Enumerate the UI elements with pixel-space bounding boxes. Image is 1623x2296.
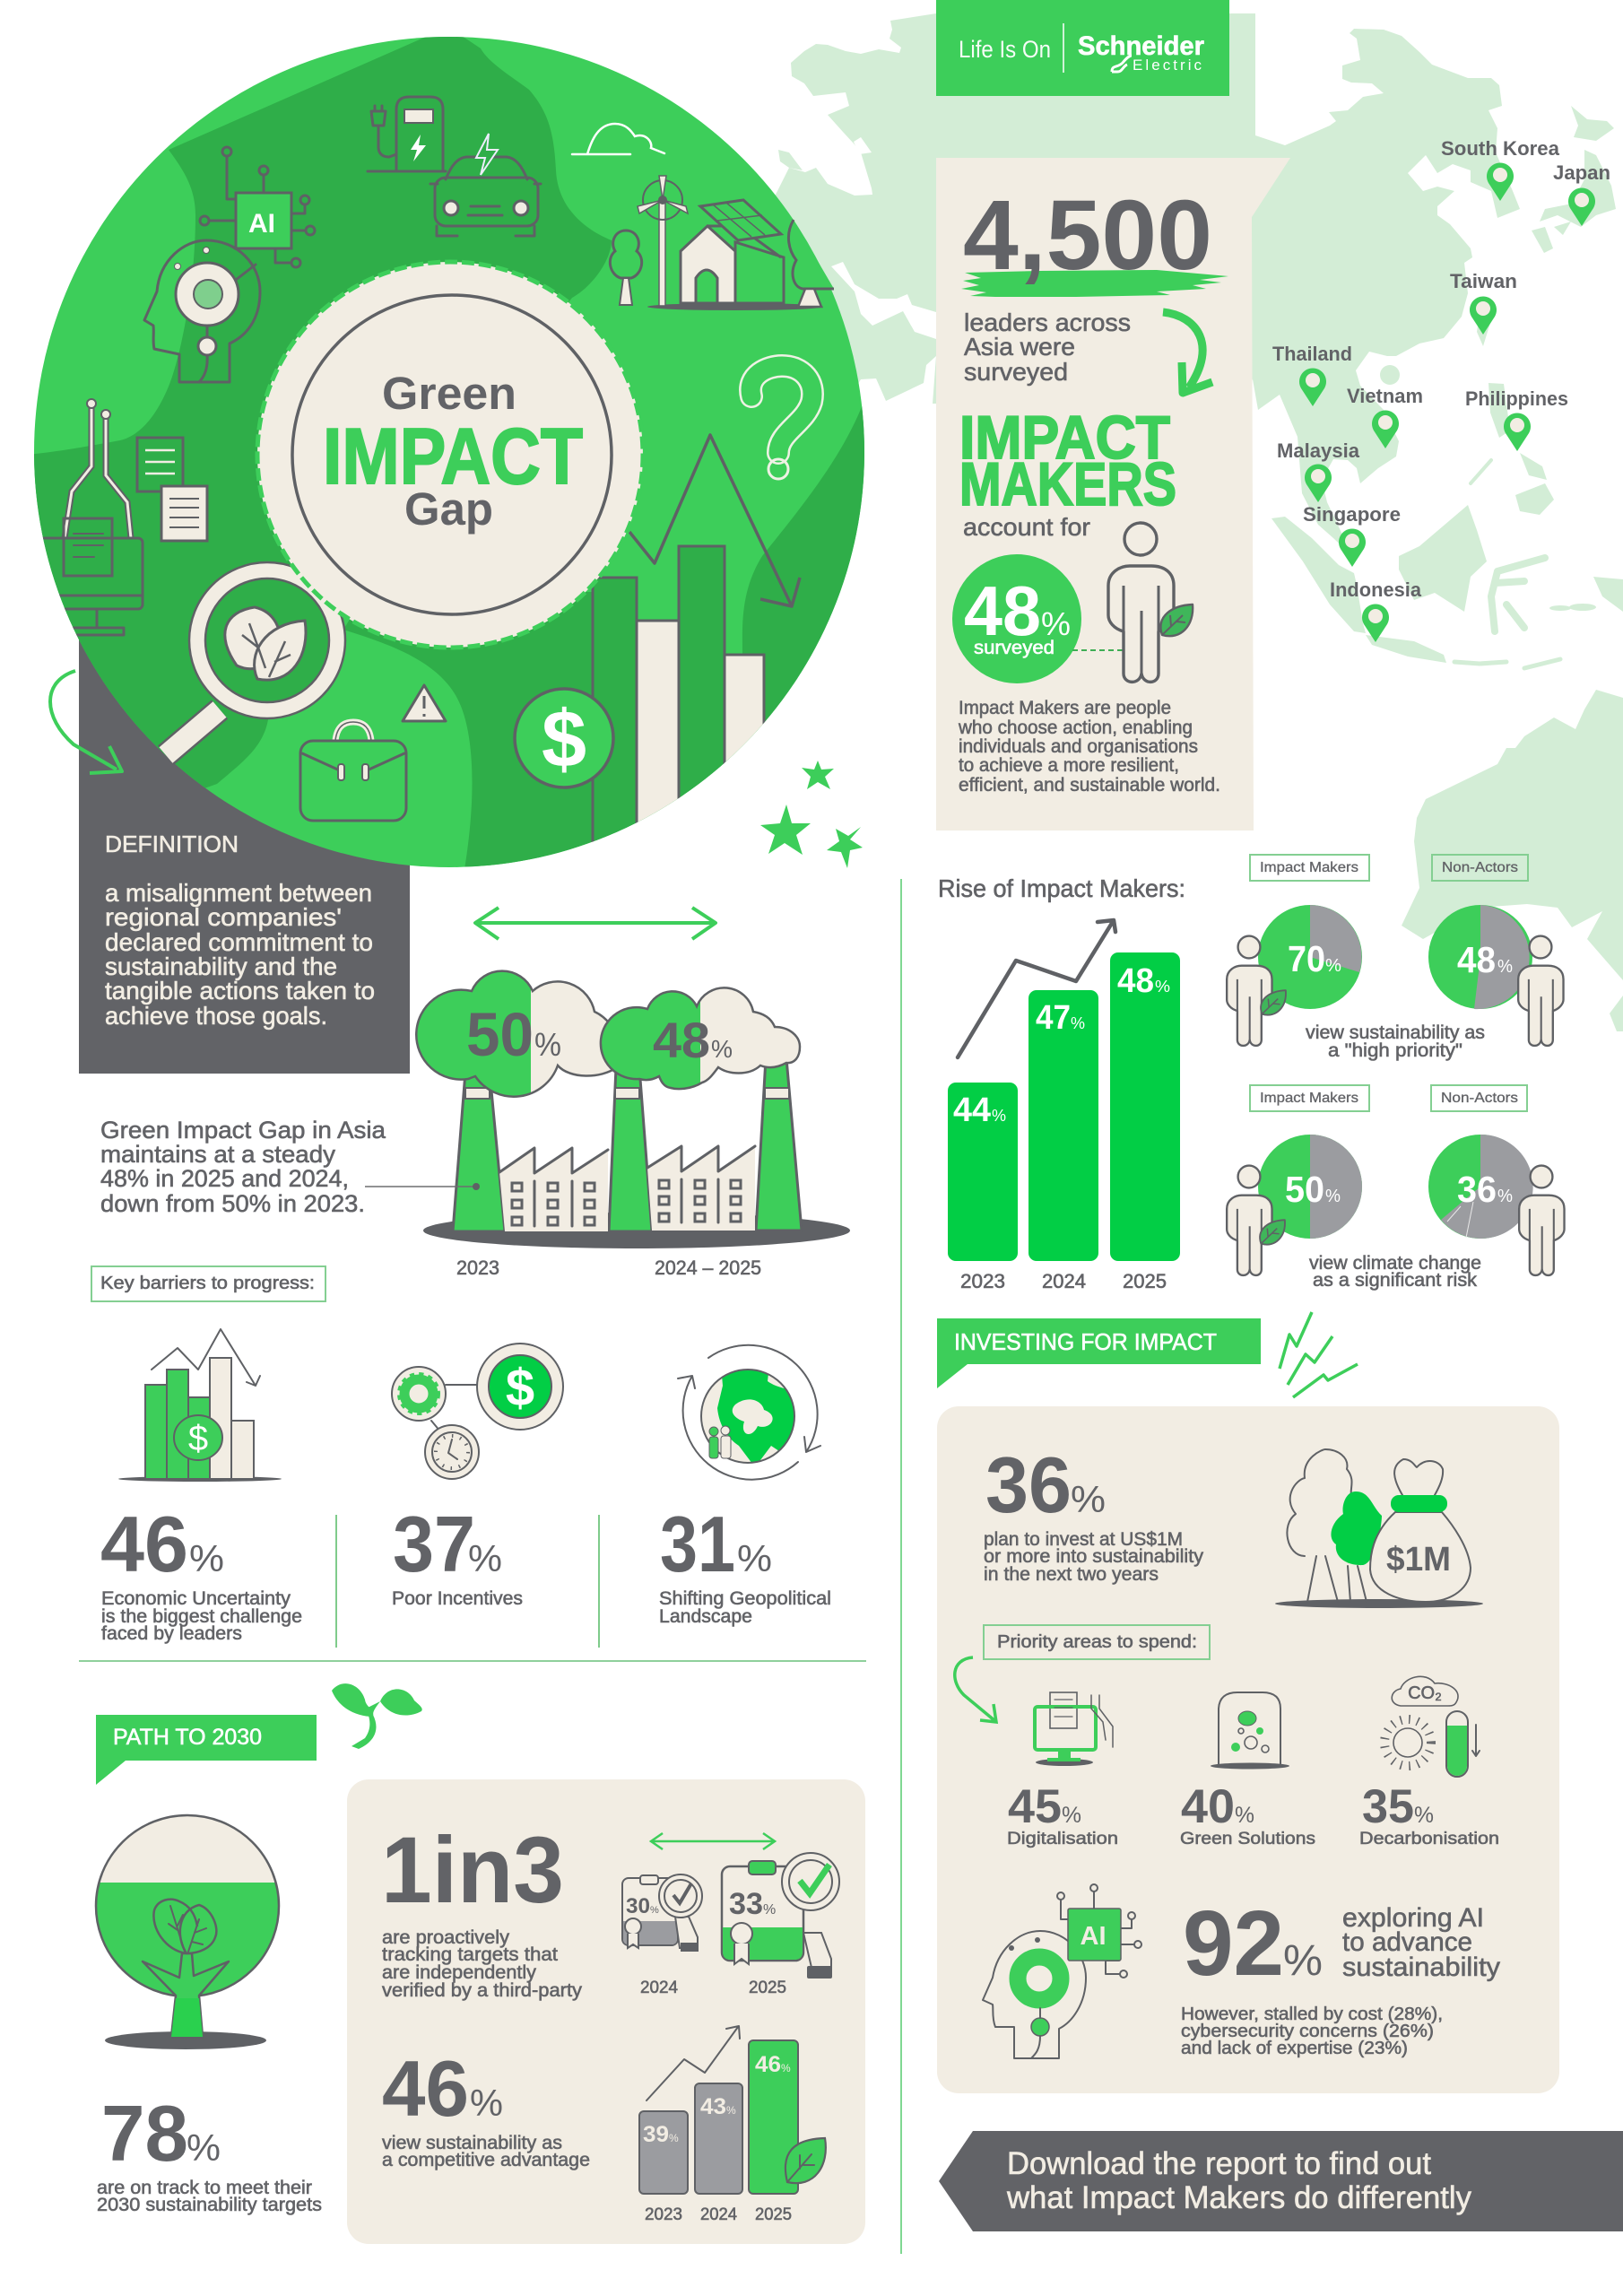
pie: impact makers 70%: 70	[1288, 938, 1325, 979]
pie row: high priority: Impact Makers	[1260, 860, 1358, 875]
48% surveyed badge	[952, 554, 1081, 683]
banner: path to 2030	[96, 1715, 317, 1785]
stat: 31% geopolitical: Shifting Geopolitical	[659, 1588, 831, 1609]
stat: 46% competitive advantage	[382, 2044, 590, 2170]
pie: non-actors 36%: %	[1497, 1187, 1513, 1206]
factory illustration with clouds: 2024 – 2025	[655, 1257, 761, 1279]
pie: non-actors 48%: %	[1497, 957, 1513, 977]
bar chart: rise of impact makers: 48	[1117, 962, 1154, 1000]
pie: impact makers 70%: %	[1325, 956, 1341, 976]
callout: gap in Asia: 48% in 2025 and 2024,	[100, 1165, 349, 1192]
panel: path statistics: 2025	[749, 1979, 786, 1997]
icon: magnifier with leaves	[166, 562, 345, 755]
stat: 45% digitalisation	[1007, 1780, 1118, 1848]
bar chart: competitive advantage: 2024	[700, 2205, 737, 2224]
icon: clipboard 33% 2025: 33	[729, 1887, 763, 1921]
panel: definition	[79, 619, 410, 1074]
pie row: climate change risk: as a significant risk	[1313, 1270, 1478, 1291]
callout: gap in Asia: Green Impact Gap in Asia	[100, 1117, 386, 1144]
centre badge: Green Impact Gap: IMPACT	[323, 412, 583, 500]
location pins and country labels	[1272, 137, 1610, 642]
stat: 40% green solutions: 40	[1181, 1780, 1235, 1833]
bar chart: rise of impact makers: 2025	[1123, 1270, 1167, 1292]
stat: 78% on track: 2030 sustainability targets	[97, 2195, 322, 2215]
pie: non-actors 36%	[1428, 1135, 1533, 1239]
icon: dollar coin: $	[542, 695, 586, 785]
bar chart: rise of impact makers	[948, 920, 1180, 1292]
factory 2023	[499, 1148, 608, 1231]
location pins and country labels: Thailand	[1272, 343, 1352, 365]
icon: digital monitor	[1035, 1692, 1113, 1766]
definition text: tangible actions taken to	[105, 977, 375, 1004]
stat: 46% economic uncertainty: faced by leaders	[101, 1623, 242, 1644]
icon: dollar coin	[515, 689, 613, 787]
stat: 31% geopolitical: Landscape	[659, 1606, 752, 1627]
bar chart: competitive advantage: %	[669, 2132, 679, 2144]
cloud 50%: %	[534, 1026, 561, 1063]
icon: globe with arrows	[678, 1345, 820, 1480]
stat: 36% plan to invest: plan to invest at US$1M	[984, 1529, 1183, 1550]
panel: path statistics: 2024	[640, 1979, 678, 1997]
arrow: rising trend	[958, 920, 1115, 1057]
tag: priority areas	[984, 1625, 1210, 1659]
stat: 37% poor incentives: %	[468, 1537, 502, 1579]
stat: 37% poor incentives: 37	[393, 1500, 475, 1588]
call to action banner: what Impact Makers do differently	[1006, 2180, 1471, 2215]
bar chart: rise of impact makers: %	[1155, 978, 1170, 996]
pie: non-actors 48%	[1428, 905, 1532, 1009]
vertical column divider	[900, 879, 902, 2254]
banner: investing for impact	[937, 1318, 1261, 1388]
definition text	[105, 831, 375, 1030]
icon: AI head lower	[983, 1884, 1141, 2058]
icon: AI head	[144, 147, 315, 382]
definition text: declared commitment to	[105, 928, 373, 956]
stat: 40% green solutions: Green Solutions	[1180, 1829, 1315, 1848]
arrow: hand-drawn curved green	[1163, 312, 1212, 393]
icon: EV charger and car	[368, 97, 541, 236]
stat: 92% exploring AI: to advance	[1342, 1927, 1472, 1957]
description: to achieve a more resilient,	[959, 755, 1179, 776]
Schneider Electric wordmark: Schneider	[1078, 31, 1204, 61]
panel: investing for impact	[937, 1406, 1559, 2093]
cloud 48%	[601, 987, 800, 1089]
stat: 31% geopolitical	[659, 1500, 831, 1627]
stat: 92% exploring AI: exploring AI	[1342, 1903, 1484, 1933]
stat: 45% digitalisation: 45	[1008, 1780, 1062, 1833]
cloud 50%	[416, 971, 617, 1097]
icon: CO2, sun, thermometer: CO₂	[1408, 1683, 1442, 1703]
tagline: Life Is On: Life Is On	[959, 36, 1051, 63]
stat: 92% exploring AI: However, stalled by cost (28%),	[1181, 2005, 1443, 2024]
panel: 4,500 leaders surveyed	[936, 158, 1290, 831]
icon: trees and money bag	[1275, 1449, 1483, 1608]
stat: 92% exploring AI: sustainability	[1342, 1952, 1500, 1982]
stat: 46% economic uncertainty: is the biggest challenge	[101, 1606, 302, 1627]
big number 4,500: 4,500	[963, 180, 1212, 291]
stat: 46% economic uncertainty: 46	[100, 1500, 188, 1588]
icon: house with solar panels, turbine, trees	[610, 176, 834, 310]
green brush underline	[961, 270, 1228, 297]
description: efficient, and sustainable world.	[959, 775, 1220, 796]
arrow: two-way green	[475, 908, 716, 939]
pie row: climate change risk	[1227, 1085, 1565, 1291]
stat: 40% green solutions: %	[1235, 1803, 1254, 1828]
stat: 78% on track	[97, 2089, 322, 2215]
world map background	[628, 13, 1623, 1031]
48% surveyed badge: 48	[964, 571, 1041, 650]
cloud 50%: 50	[466, 1000, 534, 1069]
stat: 46% competitive advantage: view sustainability as	[382, 2133, 562, 2153]
48% surveyed badge: surveyed	[974, 638, 1055, 658]
stat: 45% digitalisation: %	[1062, 1803, 1081, 1828]
centre badge: Green Impact Gap	[257, 262, 643, 648]
location pins and country labels: Malaysia	[1277, 439, 1360, 462]
pie: non-actors 36%: 36	[1457, 1169, 1497, 1210]
logo banner: Electric	[1133, 57, 1202, 74]
icon: question mark	[751, 366, 812, 479]
pie: impact makers 70%	[1258, 905, 1362, 1009]
stat: 45% digitalisation: Digitalisation	[1007, 1829, 1118, 1848]
factory illustration with clouds	[416, 971, 850, 1279]
location pins and country labels: Indonesia	[1330, 578, 1422, 601]
stat: 37% poor incentives: Poor Incentives	[392, 1588, 523, 1609]
stat: 78% on track: 78	[101, 2089, 188, 2178]
stat: 46% competitive advantage: 46	[382, 2044, 469, 2133]
pie: impact makers 50%: 50	[1285, 1169, 1324, 1210]
bar chart: rise of impact makers: %	[1071, 1014, 1085, 1032]
bar chart: competitive advantage	[639, 2026, 826, 2224]
panel: path statistics: tracking targets that	[382, 1944, 558, 1965]
bar chart: competitive advantage: 43	[700, 2094, 726, 2119]
description: who choose action, enabling	[958, 718, 1193, 738]
chimneys	[453, 1058, 802, 1231]
location pins and country labels: Taiwan	[1450, 270, 1517, 292]
pie row: climate change risk: view climate change	[1309, 1253, 1481, 1274]
panel: 4,500 leaders surveyed: surveyed	[964, 358, 1068, 386]
panel: 4,500 leaders surveyed: account for	[963, 513, 1090, 541]
panel: path statistics: verified by a third-party	[382, 1980, 583, 2001]
icon: bell jar with molecules	[1211, 1692, 1289, 1769]
description: Impact Makers are people	[959, 698, 1171, 718]
icon: trees and money bag: $1M	[1386, 1541, 1451, 1578]
call to action banner	[939, 2131, 1623, 2231]
callout: gap in Asia: maintains at a steady	[100, 1141, 335, 1168]
location pins and country labels: Japan	[1553, 161, 1610, 184]
stat: 92% exploring AI: 92	[1183, 1892, 1284, 1995]
pie row: climate change risk: Non-Actors	[1441, 1091, 1518, 1106]
pie row: high priority: Non-Actors	[1442, 860, 1518, 875]
stat: 36% plan to invest	[984, 1440, 1204, 1585]
stat: 1 in 3: 1in3	[381, 1818, 564, 1923]
stat: 46% economic uncertainty	[100, 1500, 302, 1644]
location pins and country labels: South Korea	[1441, 137, 1560, 160]
stat: 92% exploring AI: and lack of expertise (23%)	[1181, 2039, 1408, 2058]
stat: 78% on track: %	[187, 2126, 221, 2169]
bar chart: rise of impact makers: 44	[953, 1091, 991, 1129]
stat: 78% on track: are on track to meet their	[97, 2178, 312, 2198]
bar chart: competitive advantage: %	[726, 2104, 736, 2117]
stat: 36% plan to invest: in the next two years	[984, 1564, 1159, 1585]
stat: 36% plan to invest: %	[1071, 1478, 1106, 1520]
panel: path statistics	[347, 1779, 865, 2244]
stat: 46% competitive advantage: %	[470, 2082, 503, 2124]
logo banner	[936, 0, 1229, 96]
centre badge: Green Impact Gap: Green	[382, 368, 516, 419]
icon: incentives coin, gear, clock	[392, 1344, 563, 1479]
callout: gap in Asia	[100, 1117, 480, 1217]
panel: path statistics: are proactively	[382, 1927, 510, 1948]
arrow: two-way small	[651, 1833, 775, 1849]
tag: key barriers: Key barriers to progress:	[100, 1274, 315, 1293]
stat: 92% exploring AI	[1181, 1892, 1500, 2058]
48% surveyed badge: %	[1041, 605, 1071, 642]
icon: person with leaf	[1108, 523, 1193, 682]
centre badge: Green Impact Gap: Gap	[404, 483, 493, 535]
icon: AI head lower: AI	[1080, 1922, 1107, 1951]
stat: 40% green solutions	[1180, 1780, 1315, 1848]
stat: 35% decarbonisation: %	[1414, 1803, 1434, 1828]
stat: 35% decarbonisation: 35	[1362, 1780, 1414, 1833]
bar chart: competitive advantage: 2023	[645, 2205, 682, 2224]
stat: 46% competitive advantage: a competitive advantage	[382, 2150, 590, 2170]
arrow: curved to priorities	[955, 1657, 996, 1722]
factory 2024-2025	[647, 1146, 755, 1231]
pie row: high priority: view sustainability as	[1306, 1022, 1485, 1043]
bar chart: competitive advantage: %	[781, 2062, 791, 2074]
stat: 31% geopolitical: 31	[660, 1500, 735, 1588]
heading: Impact Makers: IMPACT	[959, 404, 1170, 472]
tag: priority areas: Priority areas to spend:	[997, 1632, 1197, 1652]
bar chart: competitive advantage: 39	[643, 2122, 669, 2147]
callout: gap in Asia: down from 50% in 2023.	[100, 1190, 365, 1217]
stat: 92% exploring AI: cybersecurity concerns (26%)	[1181, 2022, 1434, 2041]
stat: 31% geopolitical: %	[737, 1537, 772, 1579]
stat: 46% economic uncertainty: %	[189, 1537, 224, 1579]
icon: computer and documents	[27, 399, 207, 635]
icon: economic bar chart with coin	[118, 1329, 282, 1482]
definition text: DEFINITION	[105, 831, 239, 857]
panel: 4,500 leaders surveyed: MAKERS	[959, 450, 1176, 518]
year labels: 2023	[456, 1257, 499, 1279]
banner: path to 2030: PATH TO 2030	[113, 1725, 262, 1750]
panel: path statistics: are independently	[382, 1962, 537, 1983]
stat: 36% plan to invest: or more into sustainability	[984, 1546, 1204, 1567]
bar chart: rise of impact makers: 47	[1036, 999, 1071, 1037]
stat: 37% poor incentives	[392, 1500, 523, 1609]
bar chart: rise of impact makers: 2024	[1042, 1270, 1086, 1292]
description	[958, 698, 1220, 796]
pie row: climate change risk: Impact Makers	[1260, 1091, 1358, 1106]
definition text: sustainability and the	[105, 952, 337, 980]
stat: 35% decarbonisation: Decarbonisation	[1359, 1829, 1499, 1848]
pie row: high priority: a "high priority"	[1328, 1040, 1462, 1061]
icon: CO2, sun, thermometer	[1384, 1676, 1480, 1777]
location pins and country labels: Singapore	[1303, 503, 1401, 526]
icon: clipboard 30% 2024: %	[650, 1905, 659, 1916]
icon: lightning scribbles	[1280, 1312, 1358, 1397]
definition text: a misalignment between	[105, 879, 372, 907]
call to action banner: Download the report to find out	[1007, 2146, 1431, 2181]
icon: AI head: AI	[248, 209, 275, 239]
pie: impact makers 50%: %	[1325, 1187, 1341, 1206]
icon: clipboard 33% 2025	[722, 1853, 839, 1979]
icon: clipboard 30% 2024: 30	[626, 1894, 650, 1918]
cloud 48%: 48	[653, 1012, 710, 1068]
bar chart: rise of impact makers: %	[992, 1107, 1006, 1125]
panel: 4,500 leaders surveyed: Asia were	[964, 333, 1075, 361]
survey text: leaders across	[964, 309, 1131, 336]
icon: tree in circle	[90, 1807, 287, 2049]
pie: impact makers 50%	[1258, 1135, 1362, 1239]
pie row: high priority	[1227, 855, 1564, 1061]
definition text: regional companies'	[105, 903, 342, 931]
icon: sprout	[332, 1683, 422, 1749]
bar chart: rise of impact makers: 2023	[960, 1270, 1005, 1292]
banner: investing for impact: INVESTING FOR IMPACT	[954, 1328, 1217, 1355]
bar chart with downward arrow	[593, 435, 800, 872]
cloud 48%: %	[711, 1035, 733, 1063]
stat: 35% decarbonisation	[1359, 1780, 1499, 1848]
bar chart: competitive advantage: 2025	[755, 2205, 792, 2224]
definition text: achieve those goals.	[105, 1002, 327, 1030]
icon: warning triangle	[403, 685, 446, 721]
icon: cloud	[572, 124, 664, 154]
description: individuals and organisations	[959, 736, 1198, 757]
icon: economic bar chart with coin: $	[188, 1419, 208, 1458]
bar chart: competitive advantage: 46	[755, 2052, 781, 2077]
pie: non-actors 48%: 48	[1457, 939, 1496, 980]
location pins and country labels: Vietnam	[1347, 385, 1423, 407]
arrow: hand-drawn to definition	[50, 671, 122, 773]
icon: clipboard 33% 2025: %	[763, 1902, 776, 1918]
stat: 36% plan to invest: 36	[985, 1440, 1072, 1529]
icon: incentives coin, gear, clock: $	[506, 1359, 534, 1417]
decorative stars	[760, 761, 863, 868]
icon: briefcase	[300, 722, 406, 821]
stat: 92% exploring AI: %	[1283, 1937, 1323, 1985]
heading: rise of impact makers: Rise of Impact Makers:	[938, 874, 1185, 902]
tag: key barriers	[91, 1266, 325, 1301]
icon: clipboard 30% 2024	[622, 1874, 702, 1952]
stat: 46% economic uncertainty: Economic Uncertainty	[101, 1588, 291, 1609]
hero circle	[0, 27, 897, 874]
location pins and country labels: Philippines	[1465, 387, 1568, 410]
